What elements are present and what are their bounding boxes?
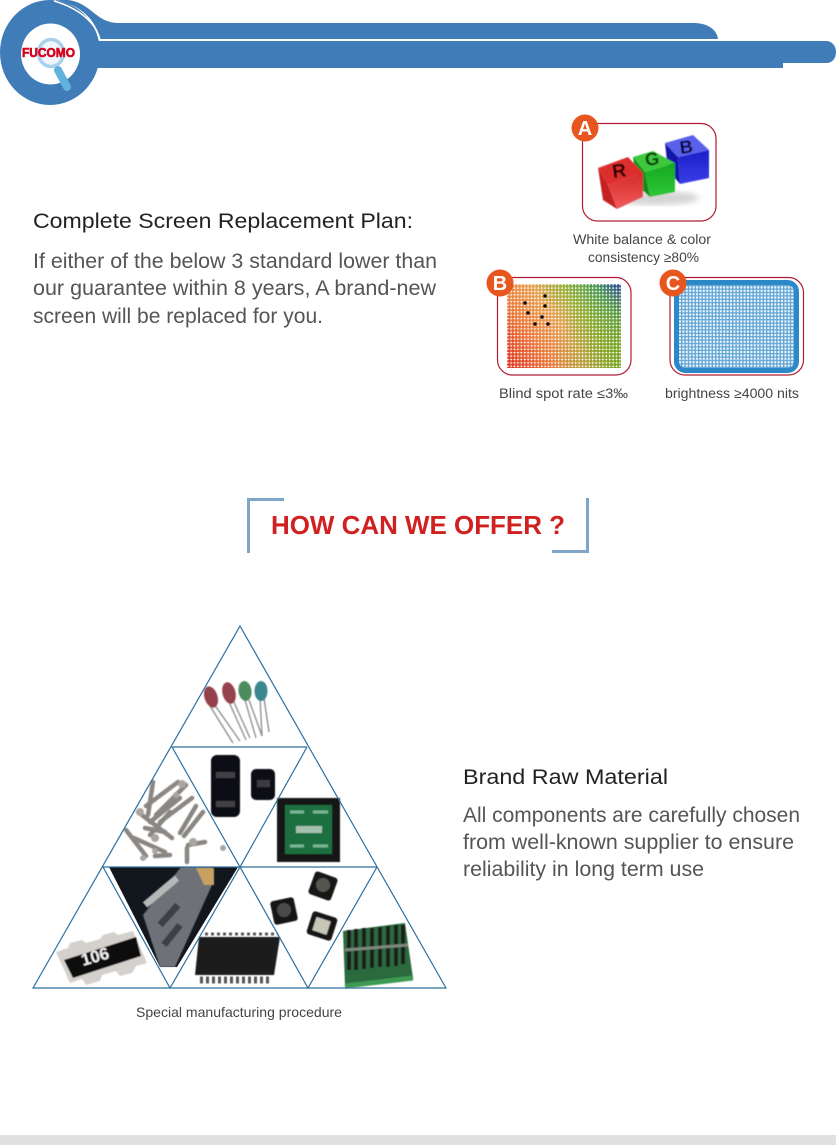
badge B [486, 270, 514, 296]
photo: driver PCB [343, 923, 413, 986]
right bracket [552, 498, 588, 552]
caption B: Blind spot rate ≤3‰ [499, 386, 629, 401]
logo text: FUCOMO [22, 45, 75, 60]
material body [463, 804, 800, 881]
left bracket [248, 500, 284, 553]
caption C: brightness ≥4000 nits [665, 386, 799, 401]
dot matrix [507, 284, 621, 368]
photo: 106 resistor: 106 [79, 944, 111, 970]
plan heading: Complete Screen Replacement Plan: [33, 210, 413, 233]
photo: IC chip [195, 934, 280, 980]
badge C: C [666, 273, 680, 295]
photo: inductors [270, 871, 338, 941]
photo: LED module [277, 798, 340, 862]
badge A: A [578, 118, 592, 140]
triangle grid lines [33, 626, 446, 988]
pyramid of component photos [33, 626, 446, 988]
material body: from well-known supplier to ensure [463, 831, 794, 854]
material body: All components are carefully chosen [463, 804, 800, 827]
heading text: HOW CAN WE OFFER ? [271, 510, 565, 540]
panel B: blind spot dots [486, 270, 631, 375]
footer band [0, 1135, 836, 1145]
blue cube [678, 150, 709, 184]
section heading [248, 498, 588, 553]
plan body: screen will be replaced for you. [33, 305, 323, 328]
plan body: If either of the below 3 standard lower than [33, 250, 437, 273]
caption A: White balance & color [573, 232, 712, 247]
blind spots [523, 294, 550, 326]
badge A [572, 114, 598, 142]
plan body: our guarantee within 8 years, A brand-new [33, 277, 437, 300]
panel C: brightness [660, 270, 804, 375]
header banner [0, 0, 836, 105]
material body: reliability in long term use [463, 858, 704, 881]
lower header bar [95, 41, 836, 68]
photo: LEDs [201, 680, 269, 743]
photo: 106 resistor [56, 931, 147, 985]
brightness screen [676, 282, 796, 370]
material heading: Brand Raw Material [463, 766, 668, 789]
photo: screws [126, 780, 226, 862]
pyramid caption: Special manufacturing procedure [136, 1004, 342, 1020]
text block: replacement plan [33, 210, 437, 328]
photo: capacitors [211, 755, 275, 817]
icon: RGB cubes [598, 135, 709, 209]
caption A [573, 232, 712, 265]
green cube [645, 163, 675, 197]
badge C [660, 270, 686, 296]
panel A: RGB blocks [572, 114, 716, 221]
icon: RGB cubes: R [611, 160, 628, 183]
logo ring [0, 0, 100, 105]
plan body [33, 250, 437, 328]
icon: RGB cubes: B [678, 136, 694, 158]
badge B: B [493, 273, 507, 295]
photo: dark connector [109, 867, 238, 967]
magnifier icon [38, 40, 67, 87]
icon: RGB cubes: G [644, 148, 660, 170]
caption A: consistency ≥80% [588, 250, 699, 265]
text block: brand raw material [463, 766, 800, 881]
red cube [608, 173, 643, 209]
upper header bar [55, 0, 718, 39]
